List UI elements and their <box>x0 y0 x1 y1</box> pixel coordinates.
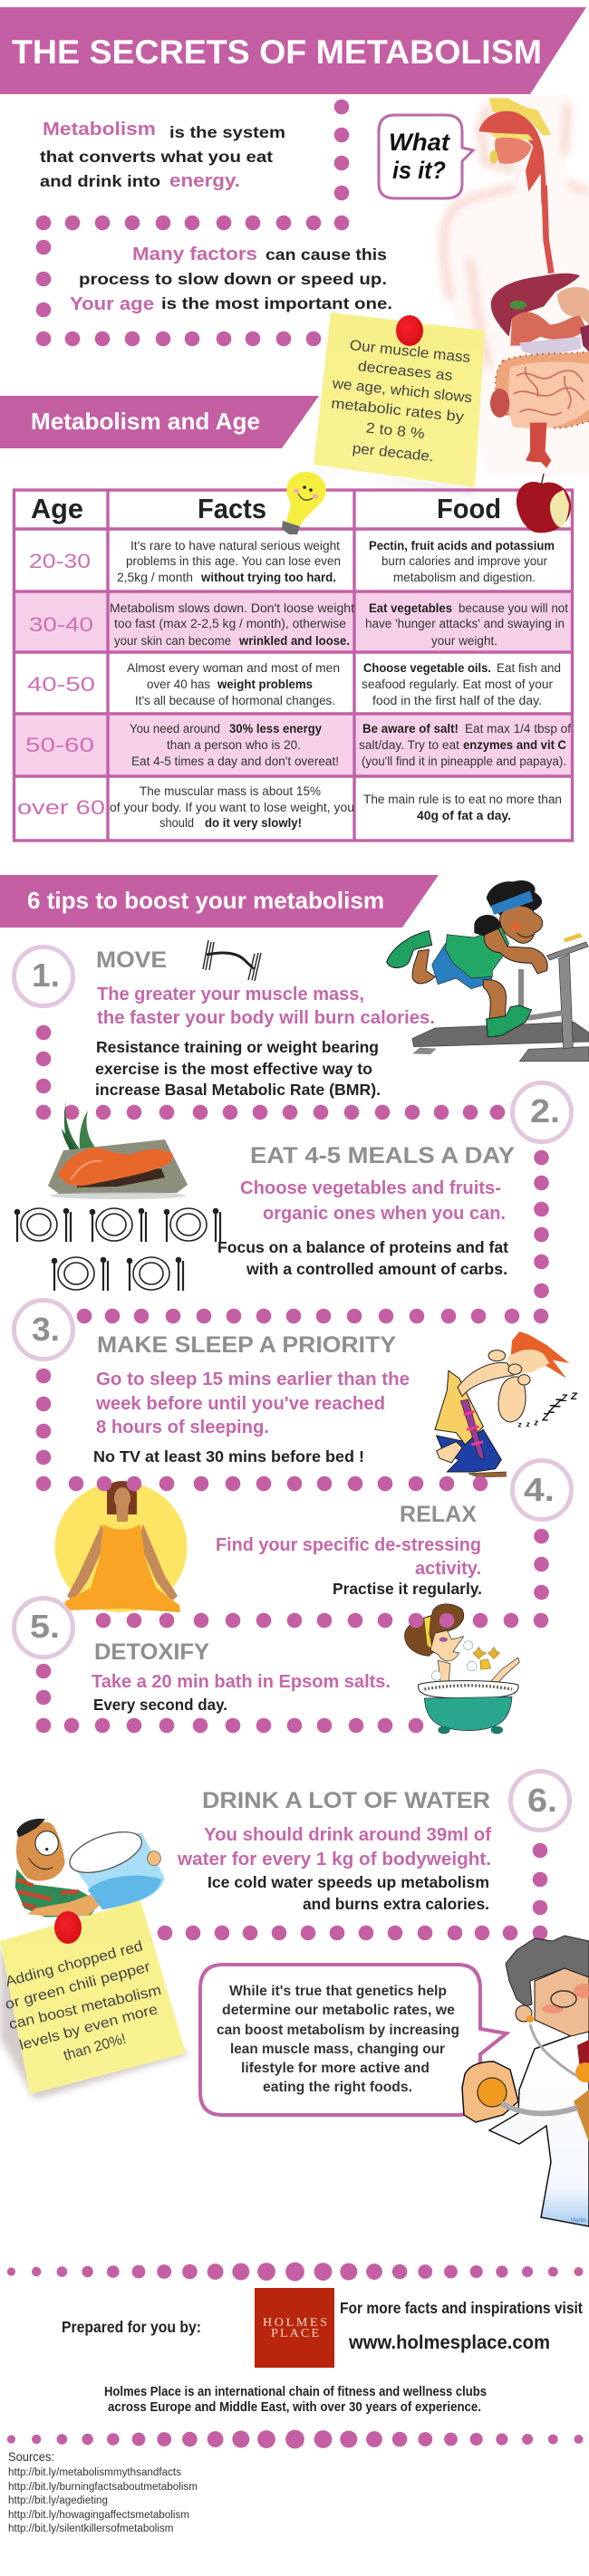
title banner: THE SECRETS OF METABOLISM <box>12 34 542 71</box>
footer: prepared by: Holmes Place is an international chain of fitness and wellness clubs <box>104 2385 487 2399</box>
text: many factors: Many factors <box>132 245 257 264</box>
icon: smiling light bulb <box>282 472 326 534</box>
section banner: metabolism and age <box>0 396 319 448</box>
table: age, facts, food: 30% less energy <box>229 722 322 735</box>
table: age, facts, food: seafood regularly. Eat most of your <box>362 678 554 691</box>
table: age, facts, food: should <box>159 816 194 830</box>
table: age, facts, food: too fast (max 2-2,5 kg / month), otherwise <box>114 617 346 630</box>
tip 1: move: MOVE <box>96 947 167 973</box>
dotted path: tips 4 to 5 <box>36 1613 548 1733</box>
illustration: sleeping man <box>435 1331 578 1477</box>
table: age, facts, food: Food <box>437 493 501 524</box>
sticky note: muscle mass: we age, which slows <box>331 376 473 406</box>
illustration: doctor with stethoscope <box>462 1936 589 2226</box>
table: age, facts, food: You need around <box>130 722 220 735</box>
tip 2: eat 4-5 meals <box>217 1083 571 1278</box>
tip 5: detoxify: Every second day. <box>93 1696 227 1714</box>
dotted path: tips 3 to 4 <box>36 1476 549 1600</box>
icon: bitten apple <box>517 474 571 533</box>
sources list: http://bit.ly/agedieting <box>8 2495 108 2506</box>
speech bubble: genetics: lean muscle mass, changing our <box>230 2042 445 2057</box>
dotted divider: bottom <box>7 2430 584 2448</box>
illustration: sleeping man: z <box>526 1419 531 1428</box>
table: age, facts, food: Eat vegetables <box>369 601 452 615</box>
number ring 3: 3. <box>32 1311 60 1348</box>
tip 6: drink a lot of water: Ice cold water speeds up metabolism <box>208 1873 489 1891</box>
footer: prepared by <box>62 2288 583 2415</box>
speech bubble: what is it: is it? <box>392 157 446 184</box>
table: age, facts, food: Eat 4-5 times a day and don't overeat! <box>131 755 339 768</box>
table: age, facts, food: of your body. If you want to lose weight, you <box>110 801 354 814</box>
dotted path: tips 2 to 3 <box>36 1309 548 1465</box>
tip 3: make sleep a priority: week before until you've reached <box>95 1394 385 1414</box>
sticky note: chili pepper: Adding chopped red <box>4 1938 144 1990</box>
sources list: Sources: <box>8 2449 54 2464</box>
sticky note: chili pepper: or green chili pepper <box>4 1959 152 2013</box>
number ring 4 <box>513 1460 571 1520</box>
table: age, facts, food: over 60 <box>17 796 105 819</box>
table: age, facts, food: have 'hunger attacks' and swaying in <box>365 617 565 630</box>
table: age, facts, food: metabolism and digestion. <box>393 571 536 584</box>
text: many factors: can cause this <box>266 245 387 264</box>
illustration: sleeping man: Z <box>547 1403 556 1416</box>
tip 1: move <box>14 940 435 1099</box>
number ring 6 <box>511 1772 569 1830</box>
number ring 3 <box>14 1301 72 1359</box>
sources list: http://bit.ly/burningfactsaboutmetabolism <box>8 2482 198 2493</box>
pin: red <box>54 1911 82 1944</box>
number ring 5 <box>14 1598 72 1658</box>
logo: Holmes Place: PLACE <box>271 2327 319 2341</box>
table: age, facts, food: 40g of fat a day. <box>417 809 511 822</box>
table: age, facts, food: problems in this age. You can lose even <box>126 554 341 568</box>
number ring 1: 1. <box>32 956 60 994</box>
table: age, facts, food: Be aware of salt! <box>362 722 459 735</box>
illustration: sleeping man: z <box>533 1418 538 1427</box>
pin: red <box>396 315 423 346</box>
sticky note: muscle mass: decreases as <box>357 359 453 384</box>
icons: five place settings <box>14 1208 220 1291</box>
text: many factors: is the most important one. <box>161 294 392 312</box>
table: age, facts, food: burn calories and improve your <box>381 554 547 568</box>
sources list: http://bit.ly/metabolismmythsandfacts <box>8 2467 181 2478</box>
text: many factors: process to slow down or speed up. <box>79 270 387 288</box>
sticky note: chili pepper: levels by even more <box>18 2002 159 2053</box>
table: age, facts, food: 30-40 <box>29 613 93 636</box>
table: age, facts, food: It's rare to have natural serious weight <box>130 539 340 553</box>
sticky note: chili pepper: than 20%! <box>62 2032 128 2064</box>
speech bubble: genetics: eating the right foods. <box>263 2080 412 2095</box>
tip 6: drink a lot of water <box>177 1772 570 1913</box>
table: age, facts, food: your weight. <box>431 634 497 648</box>
sticky note: muscle mass: per decade. <box>352 441 434 465</box>
icon: dumbbell <box>203 940 261 981</box>
table: age, facts, food: Choose vegetable oils. <box>363 661 491 675</box>
tip 1: move: exercise is the most effective way to <box>95 1060 372 1078</box>
table: age, facts, food: wrinkled and loose. <box>238 634 350 648</box>
tip 4: relax: Find your specific de-stressing <box>216 1535 481 1555</box>
sources list <box>8 2449 198 2534</box>
section banner: metabolism and age: Metabolism and Age <box>31 408 260 435</box>
tip 6: drink a lot of water: DRINK A LOT OF WATER <box>202 1788 490 1813</box>
table: age, facts, food: 50-60 <box>25 734 94 756</box>
table: age, facts, food: do it very slowly! <box>205 816 302 830</box>
table: age, facts, food: over 40 has <box>147 678 210 691</box>
tip 5: detoxify <box>14 1598 391 1714</box>
tip 4: relax: RELAX <box>400 1502 477 1527</box>
table: age, facts, food: 40-50 <box>27 673 95 696</box>
illustration: sleeping man: Z <box>570 1391 578 1402</box>
intro text: what is metabolism <box>40 120 285 191</box>
sticky note: muscle mass: Our muscle mass <box>349 338 471 366</box>
tip 1: move: The greater your muscle mass, <box>97 985 364 1004</box>
title banner <box>0 7 586 94</box>
dotted path: tip 6 <box>158 1843 547 1940</box>
number ring 2 <box>513 1083 571 1141</box>
tip 5: detoxify: Take a 20 min bath in Epsom salts. <box>92 1672 391 1692</box>
speech bubble: genetics <box>200 1965 507 2115</box>
illustration: man with water bucket <box>15 1819 165 1918</box>
tip 4: relax: Practise it regularly. <box>333 1580 482 1598</box>
table: age, facts, food: Eat fish and <box>497 661 561 675</box>
intro text: what is metabolism: and drink into <box>40 172 160 190</box>
number ring 6: 6. <box>527 1782 557 1819</box>
speech bubble: what is it: What <box>389 129 450 156</box>
table: age, facts, food: weight problems <box>217 678 313 691</box>
text: many factors: Your age <box>70 294 154 314</box>
sticky note: chili pepper <box>0 1900 190 2100</box>
table: age, facts, food: The muscular mass is about 15% <box>140 784 321 798</box>
table: age, facts, food: food in the first half of the day. <box>372 694 542 707</box>
tip 1: move: the faster your body will burn calories. <box>97 1008 435 1028</box>
number ring 4: 4. <box>524 1471 555 1508</box>
illustration: woman in bath <box>405 1604 519 1734</box>
footer: prepared by: across Europe and Middle East, with over 30 years of experience. <box>108 2400 481 2415</box>
number ring 5: 5. <box>30 1608 60 1645</box>
table: age, facts, food: 20-30 <box>29 550 91 572</box>
text: many factors <box>70 245 392 314</box>
speech bubble: genetics: While it's true that genetics help <box>229 1984 447 1999</box>
number ring 2: 2. <box>530 1092 560 1129</box>
speech bubble: genetics: determine our metabolic rates, we <box>222 2003 455 2018</box>
number ring 1 <box>14 947 72 1005</box>
tip 3: make sleep a priority: MAKE SLEEP A PRIORITY <box>97 1332 396 1358</box>
table: age, facts, food: The main rule is to eat no more than <box>363 793 562 806</box>
tip 6: drink a lot of water: water for every 1 kg of bodyweight. <box>177 1850 491 1870</box>
table: age, facts, food: because you will not <box>459 601 568 615</box>
tip 1: move: increase Basal Metabolic Rate (BMR). <box>95 1081 381 1099</box>
table: age, facts, food <box>14 490 573 841</box>
tip 3: make sleep a priority: Go to sleep 15 mins earlier than the <box>96 1370 410 1389</box>
illustration: yoga woman <box>54 1481 187 1612</box>
table: age, facts, food: your skin can become <box>114 634 231 648</box>
table: age, facts, food: Age <box>31 493 83 524</box>
tip 1: move: Resistance training or weight bearing <box>96 1038 379 1056</box>
table: age, facts, food: 2,5kg / month <box>117 571 193 584</box>
tip 6: drink a lot of water: and burns extra calories. <box>303 1895 489 1913</box>
table: age, facts, food: than a person who is 20. <box>167 738 301 752</box>
illustration: salmon on plate <box>48 1101 188 1199</box>
intro text: what is metabolism: energy. <box>169 171 240 191</box>
tip 4: relax <box>216 1460 571 1598</box>
illustration: human digestive system <box>443 95 589 476</box>
tip 5: detoxify: DETOXIFY <box>94 1639 209 1665</box>
tip 2: eat 4-5 meals: organic ones when you can. <box>263 1204 506 1224</box>
logo: Holmes Place <box>255 2288 334 2368</box>
table: age, facts, food: without trying too hard. <box>200 571 336 584</box>
section banner: 6 tips: 6 tips to boost your metabolism <box>27 887 384 914</box>
intro text: what is metabolism: Metabolism <box>43 120 156 139</box>
intro text: what is metabolism: is the system <box>169 123 285 141</box>
tip 3: make sleep a priority: 8 hours of sleeping. <box>96 1418 269 1437</box>
dotted divider: top <box>7 2263 584 2281</box>
speech bubble: genetics: lifestyle for more active and <box>241 2061 430 2076</box>
sticky note: muscle mass <box>314 312 485 494</box>
dotted path: tips 1 to 2 <box>36 1025 549 1298</box>
speech bubble: genetics: can boost metabolism by increasing <box>217 2023 459 2038</box>
tip 3: make sleep a priority: No TV at least 30 mins before bed ! <box>93 1447 364 1466</box>
footer: prepared by: www.holmesplace.com <box>348 2332 550 2353</box>
sticky note: muscle mass: metabolic rates by <box>331 396 465 426</box>
table: age, facts, food: Pectin, fruit acids and potassium <box>369 539 555 553</box>
sticky note: muscle mass: 2 to 8 % <box>365 420 425 442</box>
intro text: what is metabolism: that converts what you eat <box>40 148 273 166</box>
tip 2: eat 4-5 meals: Choose vegetables and fruits- <box>240 1178 501 1198</box>
table: age, facts, food: It's all because of hormonal changes. <box>135 694 335 707</box>
sticky note: chili pepper: can boost metabolism <box>7 1983 163 2033</box>
illustration: doctor with stethoscope: Martin <box>571 2218 586 2224</box>
logo: Holmes Place: HOLMES <box>263 2316 327 2330</box>
illustration: sleeping man: Z <box>541 1410 549 1423</box>
table: age, facts, food: Almost every woman and most of men <box>127 661 340 675</box>
tip 2: eat 4-5 meals: with a controlled amount of carbs. <box>246 1260 507 1278</box>
table: age, facts, food: enzymes and vit C <box>463 738 566 752</box>
sources list: http://bit.ly/howagingaffectsmetabolism <box>8 2510 189 2521</box>
dotted frame: intro <box>36 100 349 346</box>
table: age, facts, food: salt/day. Try to eat <box>359 738 459 752</box>
illustration: jogger on treadmill <box>387 880 589 1062</box>
illustration: sleeping man: Z <box>560 1393 568 1404</box>
table: age, facts, food: Facts <box>198 493 266 524</box>
speech bubble: what is it <box>379 115 473 198</box>
tip 3: make sleep a priority <box>14 1301 410 1466</box>
tip 6: drink a lot of water: You should drink around 39ml of <box>204 1825 491 1845</box>
section banner: 6 tips <box>0 875 439 928</box>
table: age, facts, food: (you'll find it in pineapple and papaya). <box>362 755 566 768</box>
tip 4: relax: activity. <box>415 1559 481 1579</box>
tip 2: eat 4-5 meals: Focus on a balance of proteins and fat <box>217 1238 508 1256</box>
table: age, facts, food: Eat max 1/4 tbsp of <box>465 722 571 735</box>
tip 2: eat 4-5 meals: EAT 4-5 MEALS A DAY <box>250 1143 515 1168</box>
footer: prepared by: Prepared for you by: <box>62 2318 201 2336</box>
illustration: sleeping man: z <box>517 1421 522 1429</box>
table: age, facts, food: Metabolism slows down. Don't loose weight <box>110 601 354 615</box>
sources list: http://bit.ly/silentkillersofmetabolism <box>8 2523 173 2534</box>
illustration: sleeping man: Z <box>554 1397 563 1409</box>
